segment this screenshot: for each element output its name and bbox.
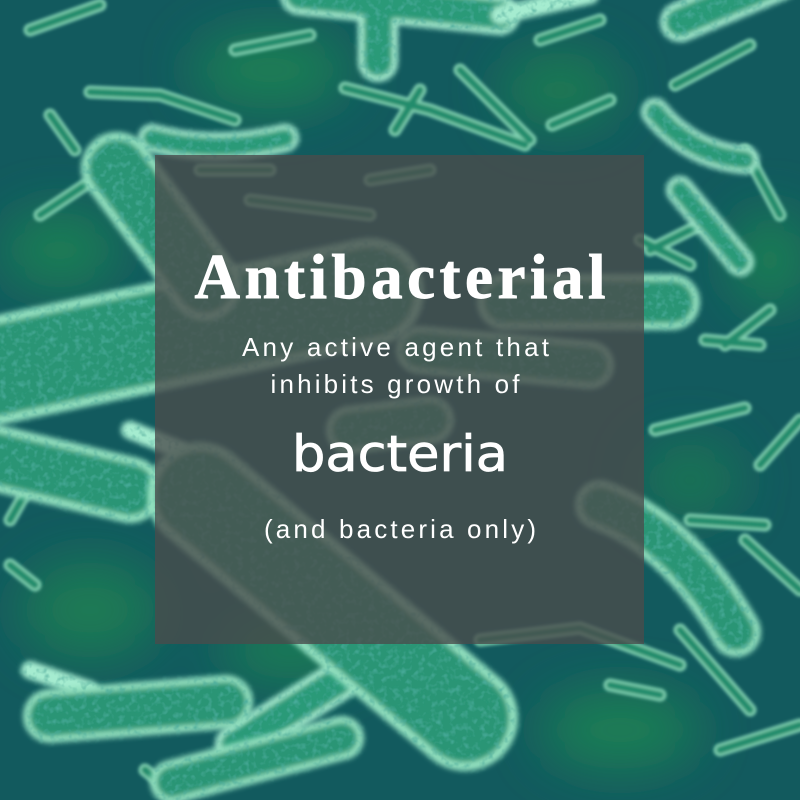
definition text: Any active agent that <box>242 332 550 362</box>
definition text: inhibits growth of <box>270 369 520 399</box>
keyword: bacteria: bacteria <box>292 425 508 483</box>
heading: Antibacterial: Antibacterial <box>194 242 606 312</box>
background: large bacteria <box>0 168 736 782</box>
definition text <box>242 332 550 399</box>
note: and bacteria only: (and bacteria only) <box>264 514 536 544</box>
panel: translucent grey square <box>155 155 644 644</box>
